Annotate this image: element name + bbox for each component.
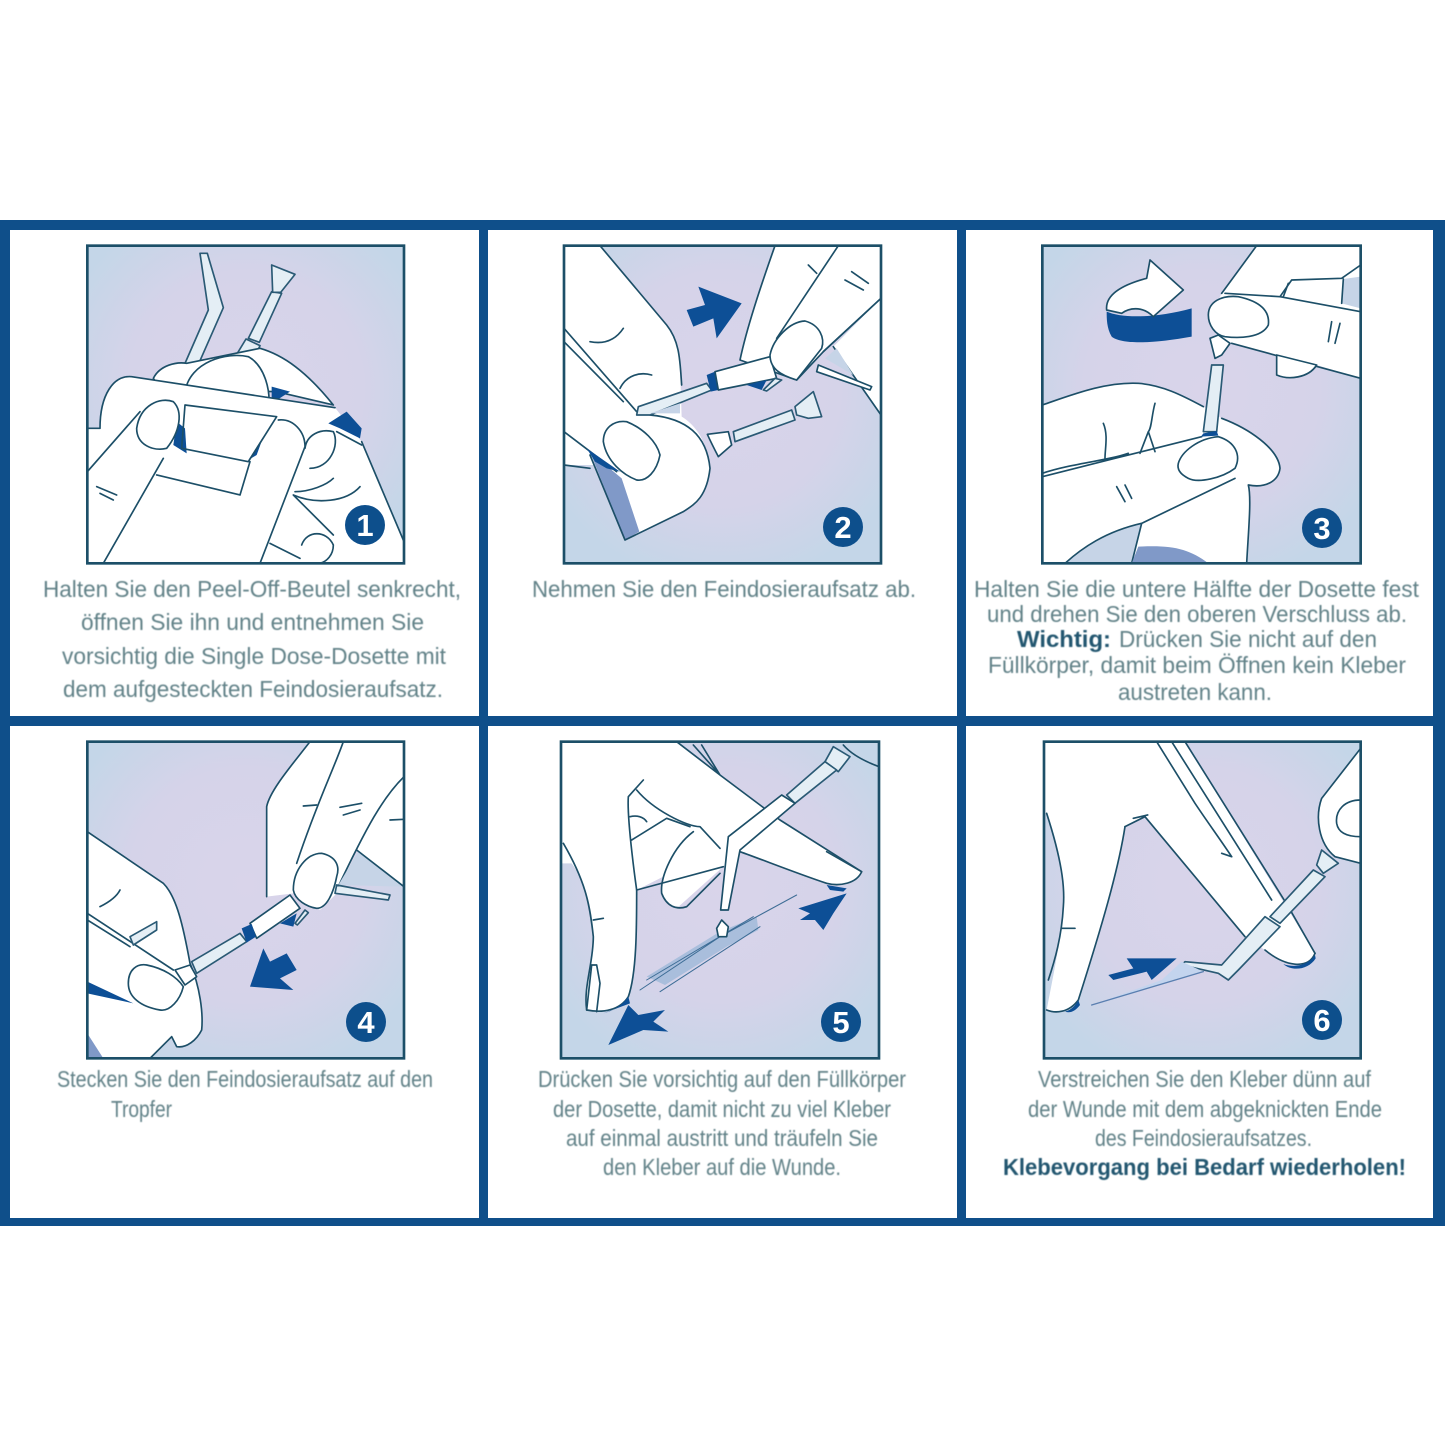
caption: step 5: den Kleber auf die Wunde. xyxy=(603,1154,841,1180)
caption: step 6: Klebevorgang bei Bedarf wiederholen! xyxy=(1003,1154,1406,1180)
number badge 4: 4 xyxy=(357,1005,375,1040)
panel: step 1 xyxy=(43,246,461,702)
number badge 2: 2 xyxy=(834,510,852,545)
number badge 5 xyxy=(821,1002,861,1042)
caption: step 3: Wichtig: xyxy=(1017,626,1111,652)
caption: step 1: öffnen Sie ihn und entnehmen Sie xyxy=(81,609,424,635)
caption: step 4 xyxy=(57,1066,433,1122)
outer blue grid frame xyxy=(0,220,1445,1226)
caption: step 3: und drehen Sie den oberen Verschluss ab. xyxy=(987,601,1407,627)
illustration: opening the peel-off pouch xyxy=(87,246,404,563)
caption: step 1: dem aufgesteckten Feindosieraufsatz. xyxy=(63,676,443,702)
number badge 3: 3 xyxy=(1313,511,1331,546)
illustration: spreading the glue thinly xyxy=(1044,742,1368,1058)
caption: step 3: Füllkörper, damit beim Öffnen kein Kleber xyxy=(988,652,1406,678)
caption: step 4: Stecken Sie den Feindosieraufsatz auf den xyxy=(57,1066,433,1092)
number badge 1: 1 xyxy=(356,508,374,543)
panel: step 6 xyxy=(1003,742,1406,1180)
caption: step 5 xyxy=(538,1066,906,1180)
caption: step 5: Drücken Sie vorsichtig auf den Füllkörper xyxy=(538,1066,906,1092)
caption: step 6: der Wunde mit dem abgeknickten Ende xyxy=(1028,1096,1382,1122)
caption: step 4: Tropfer xyxy=(111,1096,172,1122)
caption: step 6: Verstreichen Sie den Kleber dünn auf xyxy=(1038,1066,1372,1092)
caption: step 1 xyxy=(43,576,461,702)
caption: step 3 xyxy=(974,576,1420,705)
caption: step 1: Halten Sie den Peel-Off-Beutel senkrecht, xyxy=(43,576,461,602)
number badge 1 xyxy=(345,505,385,545)
illustration: dripping glue on the wound xyxy=(561,742,879,1058)
panel: step 2 xyxy=(532,246,916,602)
caption: step 1: vorsichtig die Single Dose-Dosette mit xyxy=(62,643,447,669)
caption: step 3: Drücken Sie nicht auf den xyxy=(1119,626,1377,652)
caption: step 3: austreten kann. xyxy=(1118,679,1272,705)
number badge 5: 5 xyxy=(832,1005,850,1040)
number badge 4 xyxy=(346,1002,386,1042)
caption: step 6: des Feindosieraufsatzes. xyxy=(1095,1125,1312,1151)
number badge 3 xyxy=(1302,508,1342,548)
caption: step 5: der Dosette, damit nicht zu viel Kleber xyxy=(553,1096,891,1122)
number badge 6: 6 xyxy=(1313,1003,1331,1038)
panel: step 4 xyxy=(57,742,433,1122)
illustration: twisting off the cap xyxy=(1042,246,1361,563)
number badge 2 xyxy=(823,507,863,547)
caption: step 3: Halten Sie die untere Hälfte der Dosette fest xyxy=(974,576,1420,602)
number badge 6 xyxy=(1302,1000,1342,1040)
panel: step 5 xyxy=(538,742,906,1180)
caption: step 2: Nehmen Sie den Feindosieraufsatz ab. xyxy=(532,576,916,602)
illustration: attaching the applicator to the dropper xyxy=(87,742,404,1058)
panel: step 3 xyxy=(974,246,1420,705)
illustration: removing the precision applicator xyxy=(564,246,881,563)
caption: step 5: auf einmal austritt und träufeln Sie xyxy=(566,1125,878,1151)
caption: step 6 xyxy=(1003,1066,1406,1180)
